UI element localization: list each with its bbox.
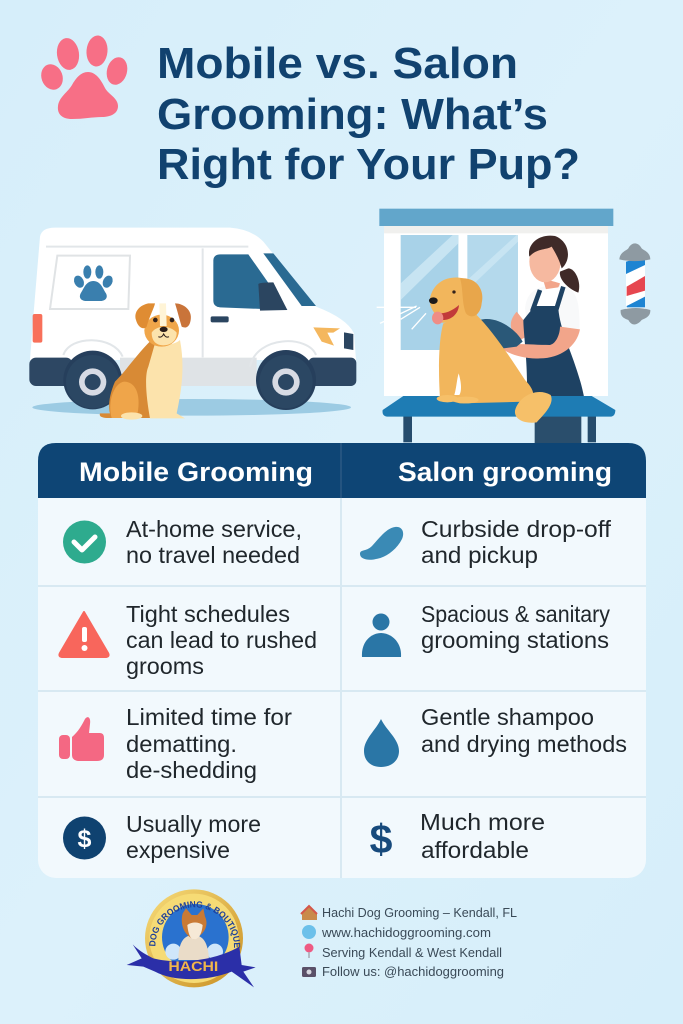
text: limited time: Limited time for xyxy=(126,704,292,730)
text: curbside: Curbside drop-off xyxy=(421,516,612,542)
text: at-home service: At-home service, xyxy=(126,516,302,542)
dog: sitting beagle xyxy=(100,303,191,420)
text: spacious: Spacious & sanitary xyxy=(421,601,610,627)
text: at-home service: no travel needed xyxy=(126,542,300,568)
text: service area: Serving Kendall & West Kendall xyxy=(322,946,502,960)
icon: water drop xyxy=(364,719,399,767)
text: usually more expensive: expensive xyxy=(126,837,230,863)
icon: house xyxy=(301,906,317,920)
text: much more affordable: Much more xyxy=(420,809,545,835)
text: tight schedules: grooms xyxy=(126,653,204,679)
illustration: mobile grooming van with dog xyxy=(29,228,356,420)
grooming table xyxy=(383,396,615,417)
dog: golden retriever xyxy=(429,277,552,423)
table header xyxy=(38,443,646,498)
icon: map pin xyxy=(304,944,314,958)
text: gentle shampoo: and drying methods xyxy=(421,731,627,757)
text: spacious xyxy=(421,601,610,653)
icon: camera xyxy=(302,967,316,977)
text: tight schedules: can lead to rushed xyxy=(126,627,317,653)
logo: Hachi badge xyxy=(126,889,256,988)
heading: salon grooming: Salon grooming xyxy=(398,457,612,487)
text: usually more expensive xyxy=(126,811,261,863)
text: limited time xyxy=(126,704,292,783)
text: curbside: and pickup xyxy=(421,542,538,568)
footer contact lines xyxy=(301,906,517,979)
icon: thumbs up xyxy=(59,717,104,761)
title xyxy=(157,39,580,189)
icon: warning xyxy=(59,612,109,657)
text: social: Follow us: @hachidoggrooming xyxy=(322,965,504,979)
text: limited time: de-shedding xyxy=(126,757,257,783)
text: limited time: dematting. xyxy=(126,731,237,757)
icon: leaf xyxy=(360,527,403,560)
illustration: salon with groomer and golden retriever xyxy=(377,209,615,443)
text: website: www.hachidoggrooming.com xyxy=(321,926,491,940)
text: gentle shampoo: Gentle shampoo xyxy=(421,704,594,730)
text: spacious: grooming stations xyxy=(421,627,609,653)
panel: table body xyxy=(38,480,646,878)
text: curbside xyxy=(421,516,612,568)
text: usually more expensive: Usually more xyxy=(126,811,261,837)
text: much more affordable: affordable xyxy=(421,837,529,863)
heading: mobile grooming: Mobile Grooming xyxy=(79,457,313,487)
icon: dollar badge xyxy=(63,816,106,860)
text: much more affordable xyxy=(420,809,545,863)
icon: check xyxy=(63,520,106,564)
title: Grooming: What’s xyxy=(157,90,548,139)
text: at-home service xyxy=(126,516,302,568)
title: Right for Your Pup? xyxy=(157,140,580,189)
apron groomer xyxy=(480,236,584,443)
text: business name: Hachi Dog Grooming – Kendall, FL xyxy=(322,906,517,920)
comparison table xyxy=(38,443,646,878)
table legs xyxy=(403,415,596,442)
icon: dollar: $ xyxy=(370,816,393,862)
icon: pink paw xyxy=(38,35,130,119)
text: tight schedules: Tight schedules xyxy=(126,601,290,627)
icon: globe xyxy=(302,925,316,939)
text: tight schedules xyxy=(126,601,317,679)
icon: person xyxy=(362,614,401,657)
title: Mobile vs. Salon xyxy=(157,39,518,88)
icon: barber pole xyxy=(619,243,650,324)
icon: dollar badge: $ xyxy=(78,825,92,853)
text: gentle shampoo xyxy=(421,704,627,757)
logo: Hachi badge: DOG GROOMING & BOUTIQUE xyxy=(149,901,240,948)
logo: Hachi badge: HACHI xyxy=(168,958,218,974)
